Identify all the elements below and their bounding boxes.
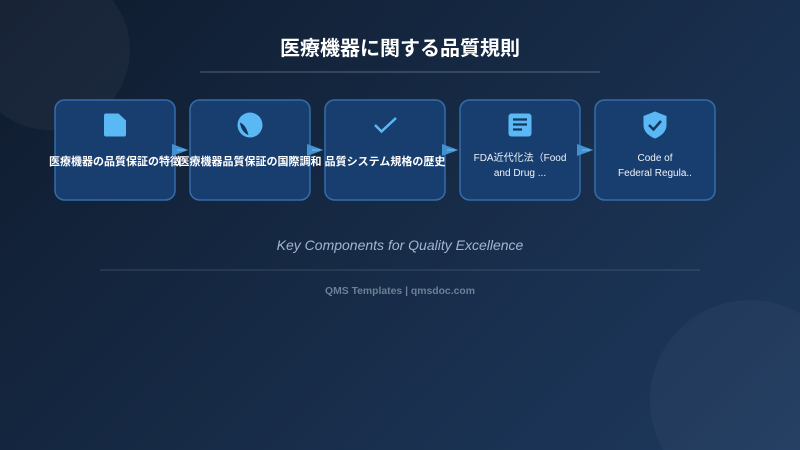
label: card 4: FDA近代化法（Food xyxy=(474,153,566,164)
arrow 4 xyxy=(577,144,594,156)
label: card 2: 医療機器品質保証の国際調和 xyxy=(178,156,322,168)
arrow 2 xyxy=(307,144,324,156)
panel: card 4 xyxy=(459,99,581,201)
panel: card 5 xyxy=(594,99,716,201)
footer: QMS Templates | qmsdoc.com xyxy=(325,286,475,297)
panel: card 2 xyxy=(189,99,311,201)
label: card 4 xyxy=(474,152,566,179)
icon: document xyxy=(104,114,126,136)
label: card 5: Code of xyxy=(637,153,673,164)
panel: card 1 xyxy=(54,99,176,201)
icon: shield check xyxy=(644,112,666,138)
icon: globe xyxy=(238,112,262,138)
subtitle: Key Components for Quality Excellence xyxy=(277,237,523,253)
arrow 1 xyxy=(172,144,188,156)
label: card 3: 品質システム規格の歴史 xyxy=(325,156,445,168)
decorative circle: top left xyxy=(0,0,130,130)
arrow 3 xyxy=(442,144,458,156)
label: card 5: Federal Regula.. xyxy=(618,168,692,179)
icon: text document xyxy=(508,114,532,136)
label: card 4: and Drug ... xyxy=(494,168,546,179)
decorative circle: bottom right xyxy=(649,299,800,450)
label: card 1: 医療機器の品質保証の特徴 xyxy=(49,156,181,168)
panel: card 3 xyxy=(324,99,446,201)
label: card 5 xyxy=(618,153,692,179)
icon: check mark xyxy=(374,117,397,134)
title: 医療機器に関する品質規則 xyxy=(280,38,520,60)
